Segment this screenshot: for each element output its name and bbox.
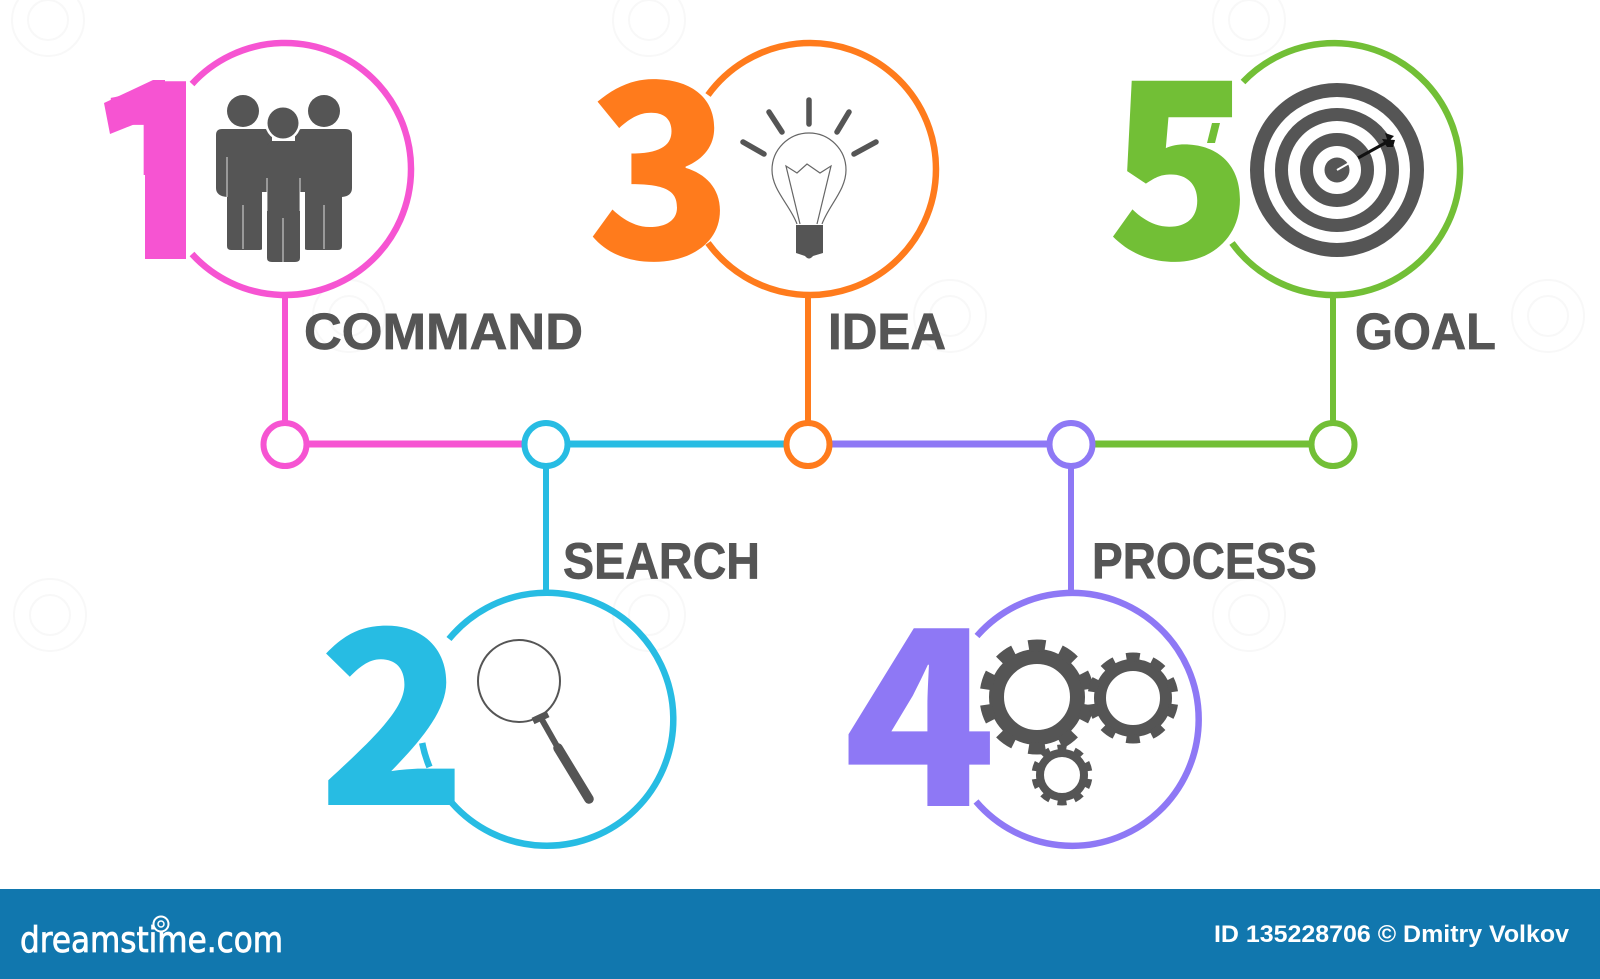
icon: team of people	[216, 95, 352, 262]
label: command: COMMAND	[304, 303, 583, 360]
step 1: command	[104, 40, 582, 420]
timeline node 4	[1050, 423, 1092, 466]
ring 1	[192, 43, 411, 295]
icon: target with arrow	[1257, 90, 1417, 250]
ring fragment inside 2	[422, 743, 430, 767]
step 3: idea	[587, 0, 946, 423]
ring fragment inside 5	[1207, 123, 1220, 143]
label: idea: IDEA	[828, 303, 946, 360]
connector line 4	[1068, 466, 1074, 592]
footer logo: dreamstime.com	[20, 920, 283, 961]
step 5: goal	[1107, 0, 1496, 423]
timeline node 1	[264, 423, 306, 466]
timeline node 5	[1312, 423, 1354, 466]
connector line 2	[543, 466, 549, 592]
label: goal: GOAL	[1355, 303, 1496, 360]
icon: gears	[986, 646, 1174, 802]
timeline connector	[285, 440, 1333, 448]
ring 4	[976, 593, 1199, 846]
ring 3	[708, 43, 936, 295]
icon: light bulb	[743, 100, 876, 258]
step 2: search	[318, 466, 760, 876]
number 1	[104, 80, 186, 259]
number 2: 2	[318, 524, 467, 876]
number 4: 4	[843, 522, 996, 877]
label: process: PROCESS	[1092, 532, 1317, 590]
ring 2	[449, 593, 673, 846]
connector line 3	[805, 296, 811, 423]
footer credit: ID 135228706 © Dmitry Volkov	[1214, 921, 1570, 948]
connector line 1	[282, 296, 288, 423]
connector line 5	[1330, 296, 1336, 423]
timeline node 3	[786, 423, 830, 466]
step 4: process	[843, 466, 1317, 877]
icon: magnifying glass	[478, 640, 589, 799]
footer bar	[0, 889, 1600, 979]
ring 5	[1232, 43, 1460, 295]
timeline node 2	[524, 423, 568, 466]
label: search: SEARCH	[563, 532, 760, 590]
